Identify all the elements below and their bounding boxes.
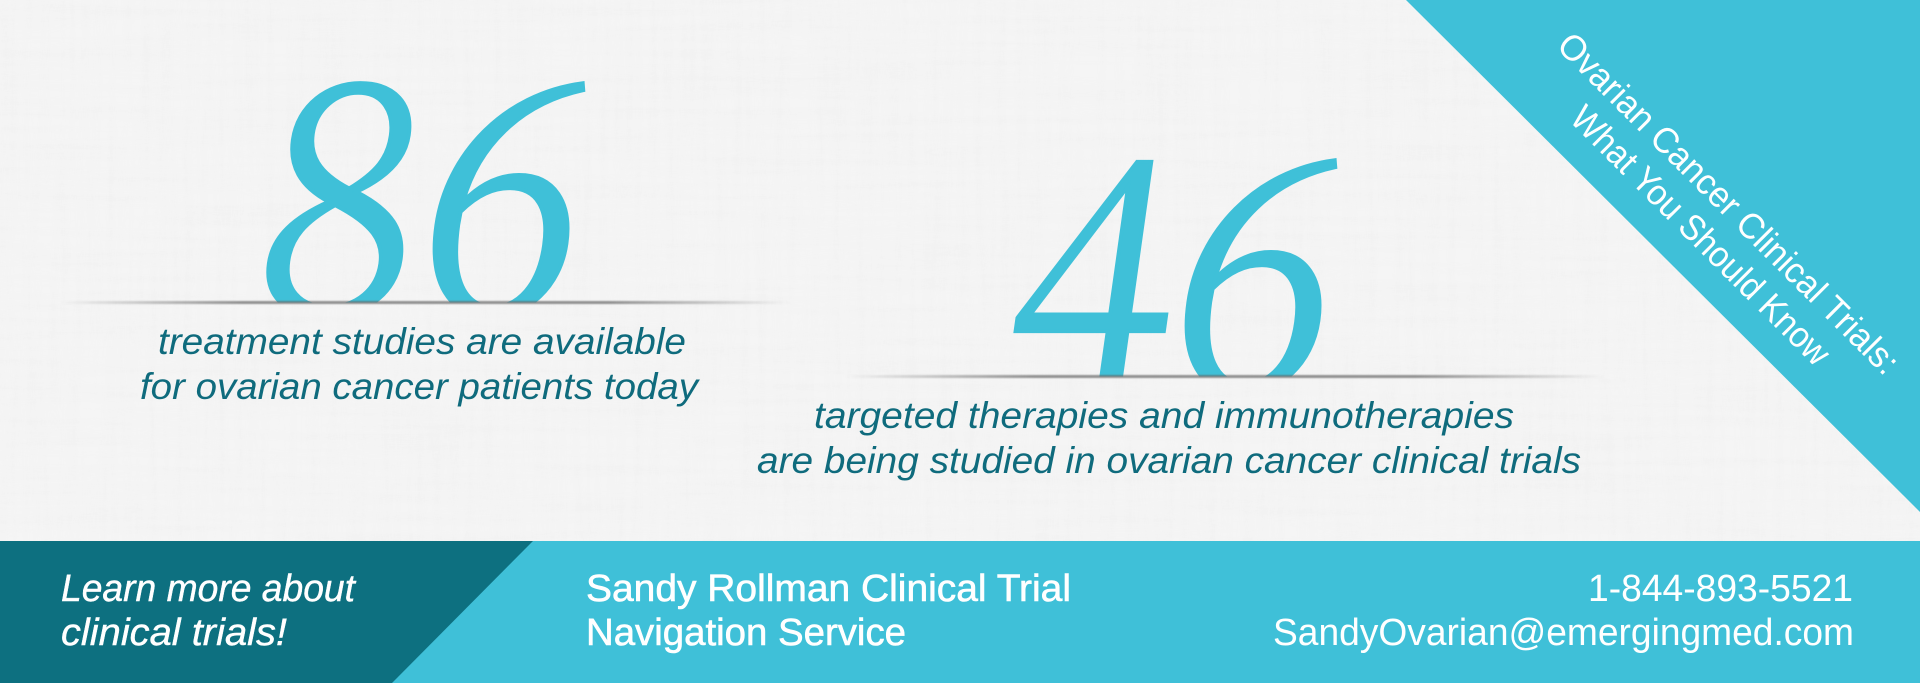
service name <box>586 568 1071 654</box>
caption 46: targeted therapies and immunotherapies <box>814 395 1514 436</box>
fold shadow line <box>845 375 1605 378</box>
call to action text <box>61 568 356 654</box>
corner banner: title triangle <box>1406 0 1920 512</box>
big number 46: 46 <box>985 21 1376 481</box>
call to action text: Learn more about <box>61 568 356 610</box>
fold shadow line <box>60 301 790 304</box>
caption 86 <box>140 321 701 407</box>
banner title: What You Should Know <box>1563 97 1840 374</box>
contact details <box>1273 568 1854 654</box>
caption 46 <box>757 395 1581 481</box>
caption 86: treatment studies are available <box>158 321 686 362</box>
service name: Navigation Service <box>586 612 906 654</box>
contact details: 1-844-893-5521 <box>1588 568 1853 610</box>
service name: Sandy Rollman Clinical Trial <box>586 568 1071 610</box>
statistic: 46 targeted therapies <box>758 158 1588 480</box>
caption 86: for ovarian cancer patients today <box>140 366 701 407</box>
call to action text: clinical trials! <box>61 612 287 654</box>
banner title: Ovarian Cancer Clinical Trials: <box>1550 24 1908 382</box>
caption 46: are being studied in ovarian cancer clinical trials <box>757 440 1581 481</box>
statistic: 86 treatment studies <box>77 81 773 406</box>
footer bar <box>0 541 1920 683</box>
contact details: SandyOvarian@emergingmed.com <box>1273 612 1854 654</box>
dark call-to-action panel <box>0 541 533 683</box>
